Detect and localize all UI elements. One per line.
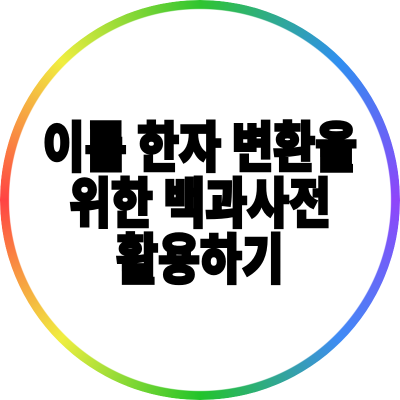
title: 위한 백과사전 — [69, 174, 331, 234]
title: 활용하기 — [116, 230, 284, 290]
title: 이름 한자 변환을 — [43, 118, 357, 178]
title — [43, 118, 357, 290]
